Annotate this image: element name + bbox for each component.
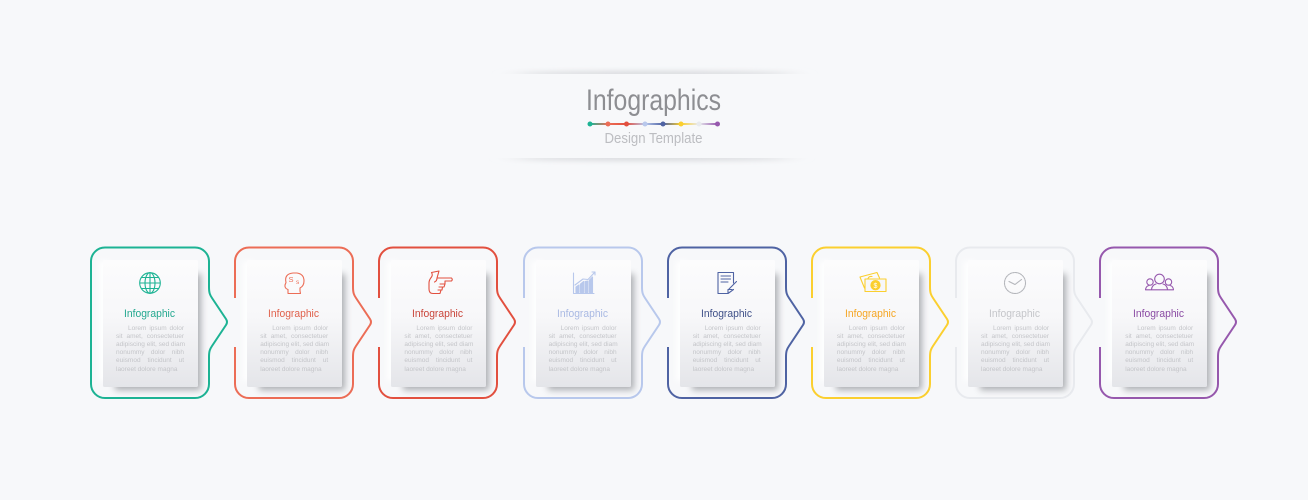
body text: euismod tincidunt ut: [404, 357, 472, 364]
card shadow: [115, 274, 201, 390]
body text: euismod tincidunt ut: [1125, 357, 1193, 364]
body text: euismod tincidunt ut: [693, 357, 761, 364]
frame arrow: [668, 248, 804, 398]
body text: [693, 325, 762, 373]
title: Infographic: [701, 308, 752, 320]
title: Infographic: [1133, 308, 1185, 320]
body text: Lorem ipsum dolor: [561, 325, 617, 332]
body text: nonummy dolor nibh: [116, 349, 184, 356]
body text: laoreet dolore magna: [693, 366, 754, 373]
icon: pointing hand: [429, 271, 453, 294]
panel: step 8 people: [1099, 246, 1237, 399]
subtitle: Design Template: [604, 130, 702, 147]
body text: laoreet dolore magna: [1125, 366, 1187, 373]
card glow: [532, 261, 542, 381]
body text: sit amet, consectetuer: [1125, 333, 1193, 340]
card shadow: [403, 274, 489, 390]
body text: sit amet, consectetuer: [404, 333, 472, 340]
card sheet: [680, 260, 775, 387]
card sheet: [536, 260, 631, 387]
title: Infographic: [412, 308, 464, 320]
frame arrow: [812, 248, 948, 398]
title: Infographic: [989, 308, 1040, 320]
icon: clock: [1004, 272, 1026, 294]
body text: Lorem ipsum dolor: [1137, 325, 1193, 332]
frame arrow: [235, 248, 371, 398]
body text: laoreet dolore magna: [116, 366, 177, 373]
timeline of coloured dots: [588, 122, 720, 126]
body text: nonummy dolor nibh: [981, 349, 1049, 356]
panel: step 6 money: [811, 246, 949, 399]
icon: head with dollar: s: [296, 279, 300, 286]
card sheet: [247, 260, 342, 387]
icon: banknotes: [860, 272, 886, 292]
panel: step 1 globe: [90, 246, 228, 399]
body text: laoreet dolore magna: [981, 366, 1042, 373]
icon: globe: [140, 273, 160, 293]
card glow: [820, 261, 830, 381]
frame arrow: [1100, 248, 1236, 398]
card sheet: [1112, 260, 1207, 387]
body text: Lorem ipsum dolor: [849, 325, 905, 332]
panel: step 7 clock: [955, 246, 1093, 399]
card glow: [676, 261, 686, 381]
body text: Lorem ipsum dolor: [272, 325, 328, 332]
icon: three people: [1146, 274, 1174, 290]
panel: step 4 bar chart: [523, 246, 661, 399]
body text: Lorem ipsum dolor: [993, 325, 1049, 332]
card shadow: [1124, 274, 1210, 390]
bottom decorative shadow band: [521, 158, 783, 162]
body text: sit amet, consectetuer: [549, 333, 617, 340]
frame arrow: [379, 248, 515, 398]
body text: [1125, 325, 1194, 373]
body text: nonummy dolor nibh: [1125, 349, 1193, 356]
body text: adipiscing elit, sed diam: [1125, 341, 1194, 348]
body text: Lorem ipsum dolor: [128, 325, 184, 332]
card glow: [1108, 261, 1118, 381]
body text: nonummy dolor nibh: [260, 349, 328, 356]
body text: adipiscing elit, sed diam: [837, 341, 906, 348]
body text: [548, 325, 618, 373]
frame arrow: [91, 248, 227, 398]
body text: [260, 325, 329, 373]
card shadow: [836, 274, 922, 390]
body text: Lorem ipsum dolor: [416, 325, 472, 332]
body text: sit amet, consectetuer: [837, 333, 905, 340]
body text: euismod tincidunt ut: [549, 357, 617, 364]
body text: adipiscing elit, sed diam: [404, 341, 473, 348]
header: title block: [521, 70, 786, 162]
body text: adipiscing elit, sed diam: [116, 341, 185, 348]
body text: adipiscing elit, sed diam: [260, 341, 329, 348]
body text: [116, 325, 185, 373]
icon: document with pen: [718, 272, 736, 294]
card sheet: [824, 260, 919, 387]
panel: step 5 document: [667, 246, 805, 399]
panel: step 3 pointing hand: [378, 246, 516, 399]
title: Infographic: [557, 308, 608, 320]
icon: head with dollar: [285, 273, 304, 294]
title: Infographic: [124, 308, 175, 320]
body text: adipiscing elit, sed diam: [693, 341, 762, 348]
title: Infographic: [845, 308, 896, 320]
body text: sit amet, consectetuer: [116, 333, 184, 340]
body text: sit amet, consectetuer: [981, 333, 1049, 340]
card sheet: [968, 260, 1063, 387]
card shadow: [692, 274, 778, 390]
body text: euismod tincidunt ut: [260, 357, 328, 364]
card shadow: [548, 274, 634, 390]
body text: euismod tincidunt ut: [116, 357, 184, 364]
card shadow: [980, 274, 1066, 390]
panel: step 2 head: [234, 246, 372, 399]
body text: adipiscing elit, sed diam: [981, 341, 1050, 348]
card glow: [99, 261, 109, 381]
icon: growth chart: [573, 272, 595, 294]
card sheet: [391, 260, 486, 387]
body text: [404, 325, 473, 373]
heading: Infographics: [586, 84, 721, 117]
body text: laoreet dolore magna: [549, 366, 610, 373]
body text: nonummy dolor nibh: [404, 349, 472, 356]
icon: banknotes: $: [873, 283, 877, 290]
card glow: [387, 261, 397, 381]
title: Infographic: [268, 308, 320, 320]
frame arrow: [524, 248, 660, 398]
body text: nonummy dolor nibh: [549, 349, 617, 356]
card shadow: [259, 274, 345, 390]
body text: [981, 325, 1050, 373]
body text: nonummy dolor nibh: [693, 349, 761, 356]
card glow: [964, 261, 974, 381]
frame arrow: [956, 248, 1092, 398]
icon: head with dollar: S: [289, 275, 294, 284]
body text: euismod tincidunt ut: [837, 357, 905, 364]
body text: laoreet dolore magna: [260, 366, 322, 373]
body text: laoreet dolore magna: [837, 366, 898, 373]
card sheet: [103, 260, 198, 387]
body text: euismod tincidunt ut: [981, 357, 1049, 364]
card glow: [243, 261, 253, 381]
body text: adipiscing elit, sed diam: [549, 341, 618, 348]
body text: [837, 325, 906, 373]
body text: sit amet, consectetuer: [693, 333, 761, 340]
body text: laoreet dolore magna: [404, 366, 466, 373]
top decorative shadow band: [524, 70, 786, 74]
body text: nonummy dolor nibh: [837, 349, 905, 356]
body text: sit amet, consectetuer: [260, 333, 328, 340]
body text: Lorem ipsum dolor: [705, 325, 761, 332]
